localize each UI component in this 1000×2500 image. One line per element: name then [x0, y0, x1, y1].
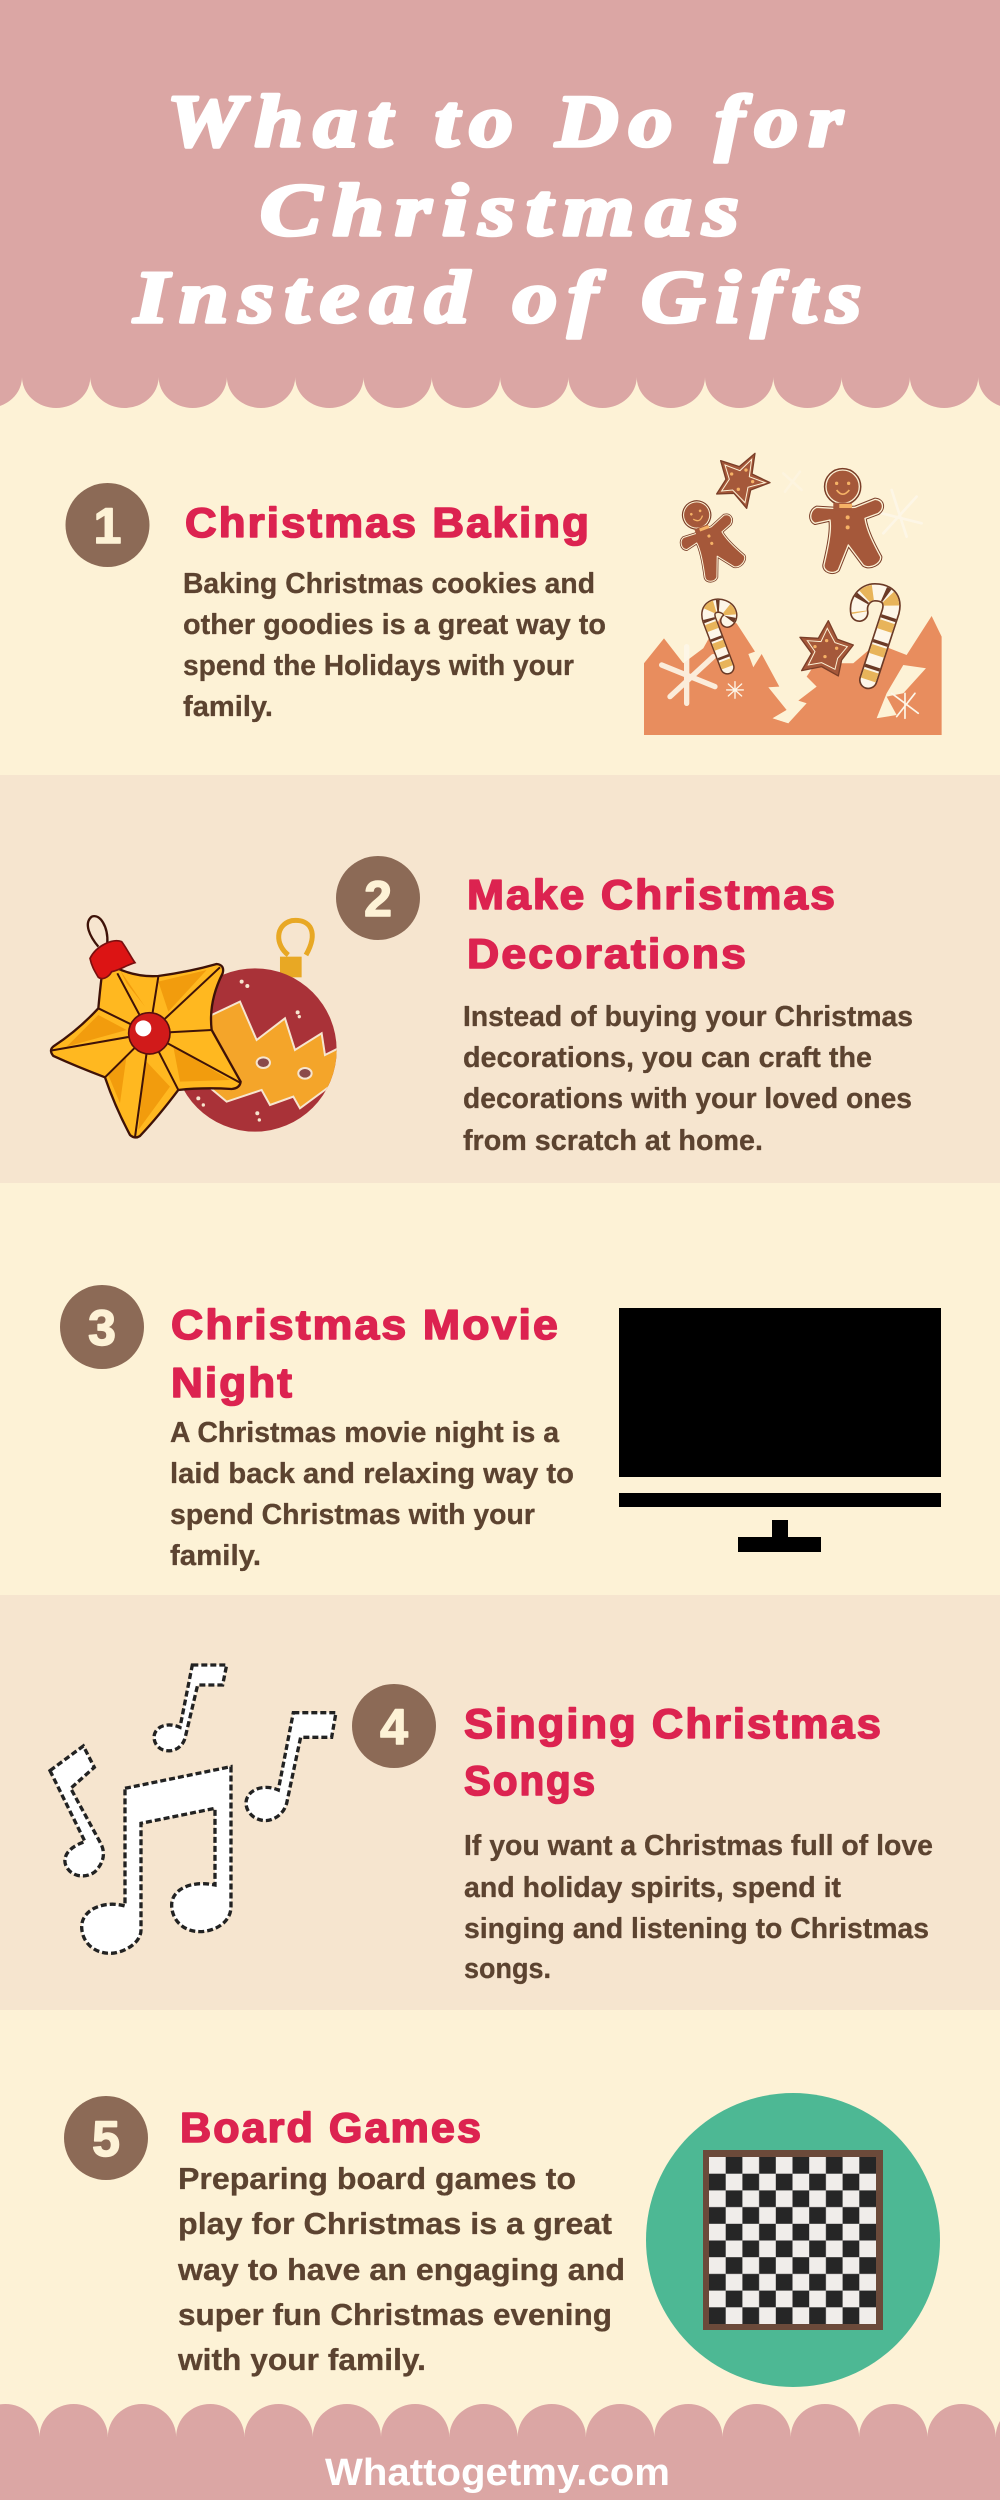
step 2 body text: decorations, you can craft the — [463, 1042, 872, 1074]
title — [133, 81, 872, 339]
step 3 heading: Christmas Movie — [171, 1301, 560, 1348]
candy cane large — [859, 592, 891, 680]
panel: background of step 3 — [0, 1183, 1000, 1595]
step 1 number badge: 1 — [94, 498, 121, 554]
step 3 body text: family. — [170, 1540, 261, 1572]
step 2 heading: Decorations — [467, 930, 748, 977]
step 1 body text — [183, 568, 606, 723]
star ornament — [51, 916, 241, 1137]
step 5 body text: super fun Christmas evening — [178, 2297, 612, 2332]
step 2 heading: Make Christmas — [467, 871, 837, 918]
icon: Christmas ornaments — [51, 916, 338, 1137]
snowflake overlays — [662, 472, 922, 718]
step 4 heading — [464, 1700, 883, 1804]
gingerbread man small — [668, 491, 750, 587]
step 1 body text: spend the Holidays with your — [183, 650, 574, 682]
step 2 body text: decorations with your loved ones — [463, 1083, 912, 1115]
icon: television — [619, 1308, 941, 1552]
step 3 heading — [171, 1301, 560, 1406]
panel: background of step 5 — [0, 2010, 1000, 2500]
step 3 heading: Night — [171, 1359, 294, 1406]
step 3 body text — [170, 1417, 574, 1572]
icon: gingerbread cookies, candy canes and trees — [644, 453, 942, 735]
step 4 heading: Songs — [464, 1757, 597, 1804]
step 5 body text — [177, 2161, 625, 2377]
candy cane small — [708, 606, 730, 667]
header banner with scalloped edge — [0, 0, 1000, 408]
step 1 body text: Baking Christmas cookies and — [183, 568, 595, 600]
step 5 number badge — [64, 2096, 148, 2180]
panel: background of step 4 — [0, 1595, 1000, 2010]
icon: music notes — [50, 1665, 336, 1953]
title: What to Do for — [167, 81, 853, 163]
step 4 body text: and holiday spirits, spend it — [464, 1872, 841, 1904]
gingerbread man large — [811, 469, 882, 572]
tree silhouettes — [644, 616, 942, 735]
step 3 body text: A Christmas movie night is a — [170, 1417, 560, 1449]
icon: checkers board on green circle — [646, 2093, 940, 2387]
step 1 number badge — [66, 483, 150, 567]
step 1 body text: other goodies is a great way to — [183, 609, 606, 641]
title: Christmas — [260, 170, 750, 252]
step 5 heading: Board Games — [180, 2104, 483, 2151]
step 3 body text: spend Christmas with your — [170, 1499, 535, 1531]
star cookie bottom — [800, 621, 853, 676]
panel: background of step 2 — [0, 775, 1000, 1183]
step 4 heading: Singing Christmas — [464, 1700, 883, 1747]
step 5 body text: Preparing board games to — [178, 2161, 576, 2196]
step 5 number badge: 5 — [92, 2111, 120, 2167]
step 4 body text — [464, 1830, 933, 1985]
step 5 body text: with your family. — [177, 2342, 426, 2377]
step 3 body text: laid back and relaxing way to — [170, 1458, 574, 1490]
step 2 heading — [467, 871, 837, 977]
star cookie top — [717, 453, 770, 508]
title: Instead of Gifts — [133, 257, 872, 339]
step 4 body text: singing and listening to Christmas — [464, 1913, 929, 1945]
round red ornament — [173, 920, 338, 1132]
step 3 number badge: 3 — [88, 1300, 116, 1356]
step 2 number badge — [336, 856, 420, 940]
step 2 body text: Instead of buying your Christmas — [463, 1001, 913, 1033]
step 2 number badge: 2 — [364, 871, 392, 927]
step 3 number badge — [60, 1285, 144, 1369]
step 2 body text: from scratch at home. — [463, 1125, 763, 1157]
step 4 body text: songs. — [464, 1953, 551, 1985]
panel: background of step 1 — [0, 0, 1000, 775]
tree gaps — [773, 665, 926, 723]
step 1 body text: family. — [183, 691, 273, 723]
step 5 body text: play for Christmas is a great — [178, 2206, 612, 2241]
step 4 number badge — [352, 1684, 436, 1768]
footer banner with scalloped edge — [0, 2404, 1000, 2500]
step 4 number badge: 4 — [380, 1699, 408, 1755]
footer website text: Whattogetmy.com — [325, 2452, 670, 2494]
step 1 heading: Christmas Baking — [185, 499, 591, 546]
step 4 body text: If you want a Christmas full of love — [464, 1830, 933, 1862]
step 5 body text: way to have an engaging and — [177, 2252, 625, 2287]
step 2 body text — [463, 1001, 913, 1157]
